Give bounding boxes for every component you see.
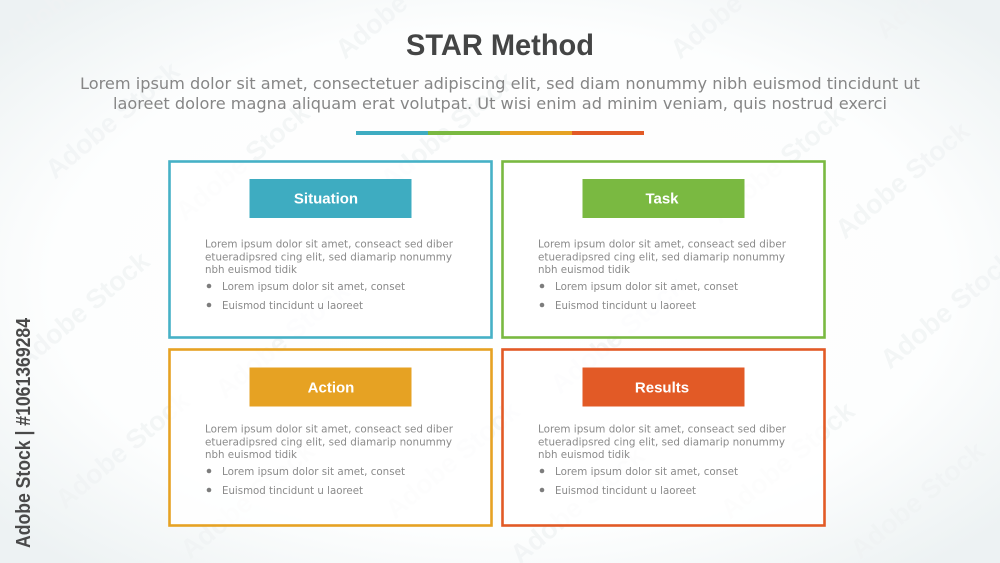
situation bullets: Euismod tincidunt u laoreet [222,299,363,312]
watermarks: Adobe Stock [170,97,316,227]
results header [582,368,744,406]
watermarks: Adobe Stock [715,395,861,525]
task bullets: Euismod tincidunt u laoreet [555,299,696,312]
results text: Lorem ipsum dolor sit amet, conseact sed diber [538,422,787,436]
watermarks: Adobe Stock [375,65,521,195]
task bullets [540,280,738,312]
task bullets: Lorem ipsum dolor sit amet, conset [555,280,738,293]
watermarks: Adobe Stock [545,270,691,400]
situation text [205,238,454,276]
results header: Results [635,380,689,396]
watermarks: Adobe Stock [830,115,976,245]
panel: situation [170,162,492,338]
task text: etueradipsred cing elit, sed diamarip nonummy [538,250,786,264]
results text: nbh euismod tidik [538,448,631,461]
watermarks: Adobe Stock [845,435,991,563]
task text: Lorem ipsum dolor sit amet, conseact sed diber [538,238,787,250]
results bullets [540,465,738,497]
action bullets: Euismod tincidunt u laoreet [222,484,363,497]
watermarks: Adobe Stock [10,245,156,375]
results text: etueradipsred cing elit, sed diamarip nonummy [538,436,786,448]
task header [582,179,744,218]
subtitle [80,74,920,113]
situation header [250,179,412,218]
stock id label: Adobe Stock | #1061369284 [13,317,35,548]
divider: four colour rule [356,131,644,135]
watermarks: Adobe Stock [210,275,356,405]
action text: etueradipsred cing elit, sed diamarip nonummy [205,436,453,448]
panel: action [170,350,492,526]
situation text: nbh euismod tidik [205,263,298,276]
action bullets: Lorem ipsum dolor sit amet, conset [222,465,405,478]
action bullets [207,465,405,497]
action header: Action [308,380,354,396]
task header: Task [645,190,679,208]
subtitle: Lorem ipsum dolor sit amet, consectetuer adipiscing elit, sed diam nonummy nibh euismod tincidunt ut [80,74,920,93]
title: STAR Method [406,29,594,62]
subtitle: laoreet dolore magna aliquam erat volutpat. Ut wisi enim ad minim veniam, quis nostrud exerci [113,94,887,113]
situation bullets: Lorem ipsum dolor sit amet, conset [222,280,405,293]
action text: nbh euismod tidik [205,448,298,461]
results bullets: Lorem ipsum dolor sit amet, conset [555,465,738,478]
watermarks: Adobe Stock [50,385,196,515]
watermarks: Adobe Stock [40,55,186,185]
watermarks: Adobe Stock [705,100,851,230]
action text [205,422,454,461]
situation text: Lorem ipsum dolor sit amet, conseact sed diber [205,238,454,250]
watermarks: Adobe Stock [175,435,321,563]
task text: nbh euismod tidik [538,263,631,276]
watermarks: Adobe Stock [380,395,526,525]
action header [250,368,412,406]
situation bullets [207,280,405,312]
action text: Lorem ipsum dolor sit amet, conseact sed diber [205,422,454,436]
results bullets: Euismod tincidunt u laoreet [555,484,696,497]
results text [538,422,787,461]
situation text: etueradipsred cing elit, sed diamarip nonummy [205,250,453,264]
panel: task [502,162,824,338]
task text [538,238,787,276]
situation header: Situation [294,190,358,208]
panel: results [502,350,824,526]
